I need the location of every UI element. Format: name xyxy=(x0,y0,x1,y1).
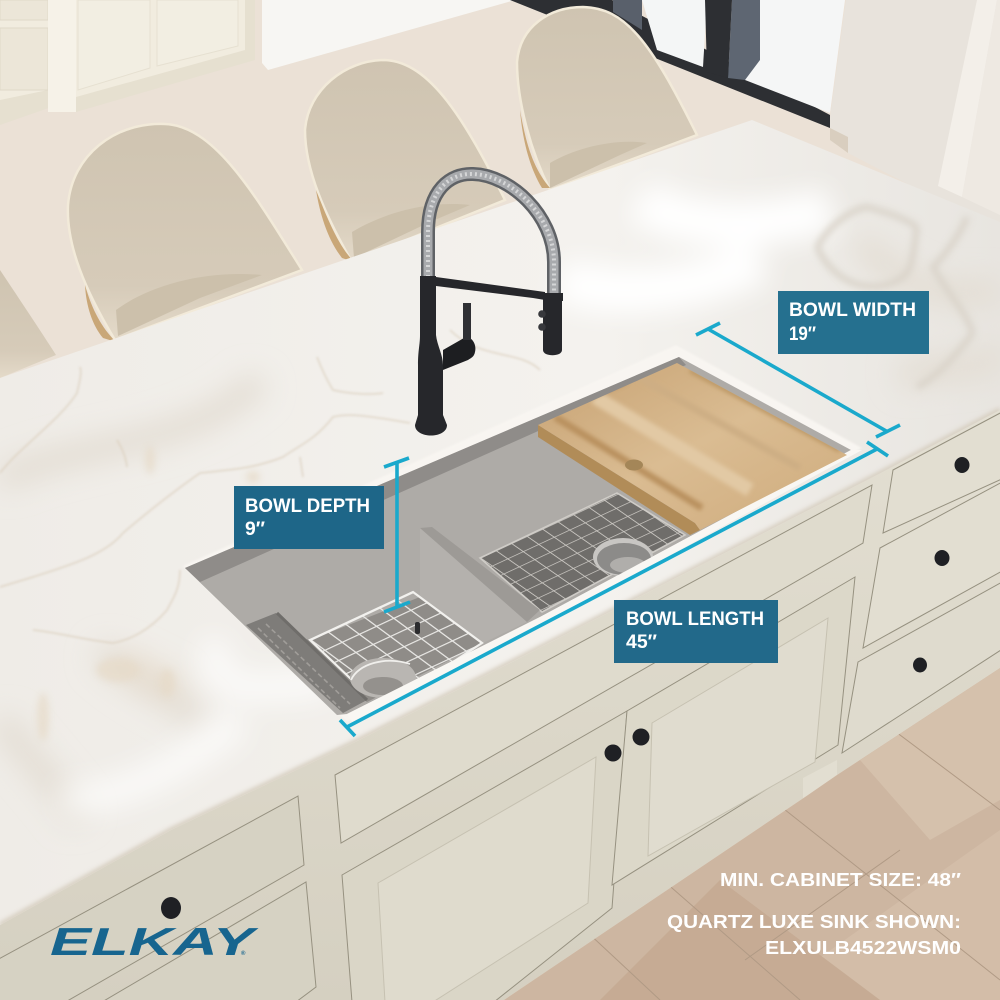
callout: bowl length: 45″ xyxy=(626,632,657,653)
caption: cabinet size and model: MIN. CABINET SIZE: 48″ xyxy=(720,870,961,890)
callout: bowl depth xyxy=(234,486,384,549)
cutting board xyxy=(538,363,847,535)
marble veins xyxy=(0,200,1000,820)
callout: bowl width xyxy=(778,291,929,354)
logo: Elkay: ELKAY xyxy=(50,921,259,964)
back lip xyxy=(185,357,686,582)
left grid xyxy=(310,592,482,700)
dimension: bowl depth xyxy=(384,458,410,612)
spray head xyxy=(543,293,563,355)
dimension: bowl length xyxy=(340,442,888,736)
callout: bowl width: 19″ xyxy=(789,324,816,345)
chair 1 xyxy=(68,124,302,342)
window frames xyxy=(510,0,845,128)
chair 0 xyxy=(0,270,56,378)
right wall xyxy=(830,0,1000,232)
caption: cabinet size and model: QUARTZ LUXE SINK SHOWN: xyxy=(667,912,961,932)
faucet arm xyxy=(436,277,545,300)
spring hose xyxy=(428,174,554,293)
sink basin xyxy=(183,345,862,722)
faucet body xyxy=(415,276,447,436)
logo: Elkay: ® xyxy=(241,950,246,957)
chair 2 xyxy=(305,60,505,262)
left bowl floor xyxy=(277,597,483,702)
divider xyxy=(420,527,540,643)
callout: bowl depth: BOWL DEPTH xyxy=(245,496,370,517)
faucet handle xyxy=(443,337,475,370)
callout: bowl width: BOWL WIDTH xyxy=(789,300,916,321)
rear cabinets xyxy=(0,0,255,125)
right drain xyxy=(593,538,653,576)
left drain xyxy=(350,658,416,698)
faucet xyxy=(415,174,563,435)
caption: cabinet size and model xyxy=(667,870,961,958)
dimension: bowl width xyxy=(696,323,900,437)
left tray xyxy=(246,613,367,713)
logo: Elkay xyxy=(50,921,259,964)
callout: bowl length xyxy=(614,600,778,663)
floor planks xyxy=(500,660,1000,1000)
basin cavity xyxy=(185,357,851,715)
rear wall panel xyxy=(262,0,515,70)
callout: bowl depth: 9″ xyxy=(245,519,265,540)
right bowl floor xyxy=(480,493,685,612)
cabinet panels xyxy=(0,411,1000,1000)
counter edge shading xyxy=(0,410,1000,925)
faucet lever xyxy=(463,303,471,340)
cabinet knobs xyxy=(161,457,970,919)
cabinetry base xyxy=(0,410,1000,1000)
callout: bowl length: BOWL LENGTH xyxy=(626,609,764,630)
right grid xyxy=(480,493,685,612)
strainer clip xyxy=(415,622,420,634)
chair 3 xyxy=(517,7,697,190)
front rim xyxy=(347,450,862,722)
caption: cabinet size and model: ELXULB4522WSM0 xyxy=(765,938,961,958)
board hole xyxy=(625,460,643,470)
